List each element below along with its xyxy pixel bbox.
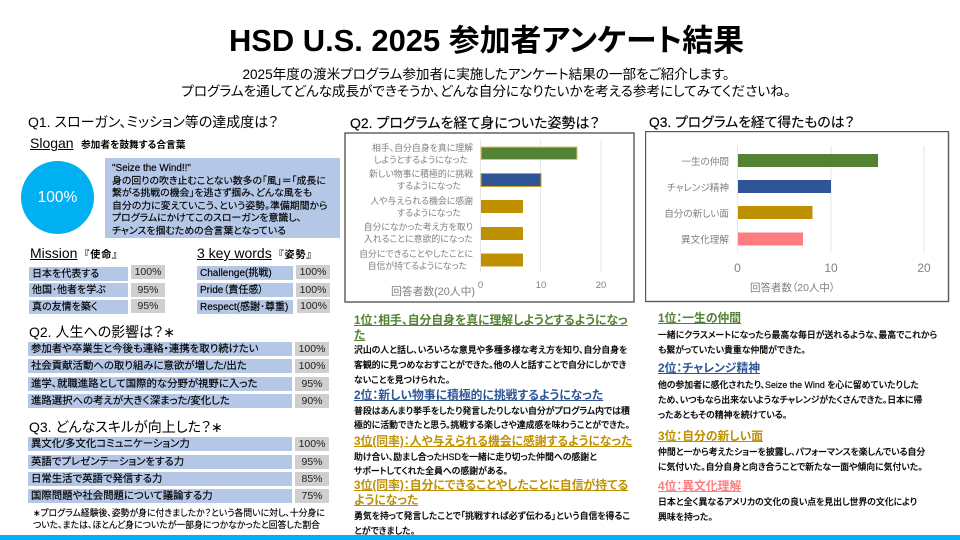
slogan text box: 自分の力に変えていこう、という姿勢。準備期間から [112, 201, 328, 212]
rank 2 comment [354, 406, 630, 430]
chart: Q2 attitudes bar chart: 入れることに意欲的になった [364, 233, 473, 244]
mission table: 95% [137, 300, 158, 312]
slogan text box: 身の回りの吹き止むことない数多の「風」＝「成長に [112, 176, 326, 187]
heading: 3 key words: 3 key words 『姿勢』 [197, 245, 312, 261]
panel: Q2 life impact [28, 324, 329, 408]
row [28, 377, 329, 391]
chart: Q2 attitudes bar chart: 人や与えられる機会に感謝 [370, 195, 473, 206]
slogan text box: プログラムにかけてこのスローガンを意識し、 [112, 213, 302, 224]
slogan text box: チャンスを掴むための合言葉となっている [112, 226, 286, 237]
chart: Q3 gains bar chart: 自分の新しい面 [664, 208, 729, 220]
intro text: プログラムを通してどんな成長ができそうか、どんな自分になりたいかを考える参考にしてみてくださいね。 [181, 84, 791, 98]
chart: Q3 gains bar chart: 回答者数（20人中） [750, 281, 835, 294]
mission table: 真の友情を築く [32, 302, 98, 313]
chart: Q2 attitudes bar chart: 自信が持てるようになった [368, 260, 467, 271]
row: 85% [301, 473, 322, 485]
rank 3 comment [658, 446, 926, 472]
row: 社会貢献活動への取り組みに意欲が増した/出た [31, 361, 247, 372]
slogan text box: "Seize the Wind!!" [112, 163, 191, 174]
rank 1 heading: 1位：相手、自分自身を真に理解しようとするようになっ [354, 313, 628, 327]
rank 2 comment: 極的に活動できたと思う。挑戦する楽しさや達成感を味わうことができた。 [354, 420, 630, 430]
rank 4 comment [658, 497, 917, 522]
row [28, 455, 329, 469]
row: 進学、就職進路として国際的な分野が視野に入った [31, 379, 257, 390]
chart: Q2 attitudes bar chart: 相手、自分自身を真に理解 [372, 142, 473, 153]
heading: Slogan: Slogan 参加者を鼓舞する合言葉 [30, 135, 185, 151]
row: 95% [301, 456, 322, 468]
rank 4 comment: 日本と全く異なるアメリカの文化の良い点を見出し世界の文化により [658, 497, 917, 507]
chart: Q3 gains bar chart: 10 [824, 261, 838, 275]
chart: Q2 attitudes bar chart: するようになった [397, 181, 461, 191]
rank 3 heading: 3位(同率)：人や与えられる機会に感謝するようになった [354, 434, 632, 448]
key words table: 100% [300, 284, 326, 296]
rank 4 heading: 4位：異文化理解 [658, 479, 741, 493]
rank 3 comment: 助け合い、励まし合ったHSDを一緒に走り切った仲間への感謝と [354, 452, 597, 462]
row: 75% [301, 490, 322, 502]
rank 2 comment [658, 380, 922, 420]
footnote [33, 508, 325, 530]
rank 1 heading [354, 313, 628, 342]
heading: chart Q3: Q3. プログラムを経て得たものは？ [649, 115, 854, 130]
chart: Q3 gains bar chart: チャレンジ精神 [667, 182, 729, 194]
rank 3 tie comment: とができました。 [354, 526, 415, 536]
chart: Q3 gains bar chart: 一生の仲間 [681, 156, 729, 168]
rank 3 tie heading: 3位(同率)：自分にできることやしたことに自信が持てる [354, 478, 628, 492]
rank 1 comment: 客観的に見つめなおすことができた。他の人と話すことで自分にしかでき [354, 360, 626, 370]
chart: Q2 attitudes bar chart: 回答者数(20人中) [391, 284, 475, 298]
title: HSD U.S. 2025 参加者アンケート結果 [229, 23, 744, 58]
rank 3 comment [354, 452, 597, 476]
panel: Q2 comments [354, 313, 632, 536]
intro text: 2025年度の渡米プログラム参加者に実施したアンケート結果の一部をご紹介します。 [242, 67, 730, 82]
row: 国際問題や社会問題について議論する力 [31, 491, 213, 502]
row: 異文化/多文化コミュニケーション力 [31, 439, 190, 450]
row [28, 342, 329, 356]
key words table [197, 265, 330, 314]
rank 1 comment [354, 344, 627, 385]
heading: Q1: Q1. スローガン、ミッション等の達成度は？ [28, 114, 278, 130]
chart: Q2 attitudes bar chart: 20 [596, 280, 606, 291]
rank 3 tie heading [354, 478, 628, 507]
row [28, 359, 329, 373]
circle: 100%: 100% [38, 189, 77, 206]
bottom band [0, 535, 960, 540]
panel: Q1 achievement [21, 114, 340, 314]
mission table: 100% [135, 266, 161, 278]
rank 3 comment: 仲間と一から考えたショーを披露し、パフォーマンスを楽しんでいる自分 [658, 447, 925, 457]
mission table: 日本を代表する [32, 269, 99, 280]
row [28, 472, 329, 486]
row: 日常生活で英語で発信する力 [31, 474, 162, 485]
rank 2 comment: ため、いつもなら出来ないようなチャレンジがたくさんできた。日本に帰 [658, 395, 922, 405]
rank 2 heading: 2位：新しい物事に積極的に挑戦するようになった [354, 388, 603, 402]
mission table: 95% [137, 284, 158, 296]
chart: Q2 attitudes bar chart: 自分にできることやしたことに [359, 248, 473, 259]
chart: Q2 attitudes bar chart: 新しい物事に積極的に挑戦 [369, 168, 473, 179]
chart: Q3 gains bar chart: 20 [917, 261, 931, 275]
row: 100% [299, 360, 325, 372]
rank 3 tie comment [354, 510, 630, 536]
rank 1 comment: 沢山の人と話し、いろいろな意見や多種多様な考え方を知り、自分自身を [354, 345, 627, 355]
row: 進路選択への考えが大きく深まった/変化した [31, 396, 230, 407]
panel: Q3 comments [658, 311, 937, 522]
chart: Q2 attitudes bar chart: 10 [536, 280, 546, 291]
chart: Q2 attitudes bar chart: 自分になかった考え方を取り [364, 221, 473, 232]
row [28, 489, 329, 503]
rank 3 tie comment: 勇気を持って発言したことで「挑戦すれば必ず伝わる」という自信を得るこ [354, 511, 630, 521]
chart: Q3 gains bar chart: 異文化理解 [681, 234, 729, 246]
chart: Q3 gains bar chart [645, 131, 950, 302]
rank 3 tie heading: ようになった [354, 493, 418, 507]
row: 100% [299, 438, 325, 450]
row: 90% [301, 395, 322, 407]
rank 1 comment [658, 330, 937, 355]
key words table: Pride（責任感） [200, 285, 263, 296]
rank 1 comment: 一緒にクラスメートになったら最高な毎日が送れるような、最高でこれから [658, 330, 937, 340]
row: 100% [299, 343, 325, 355]
heading: Mission: Mission 『使命』 [30, 245, 118, 261]
row: 参加者や卒業生と今後も連絡・連携を取り続けたい [31, 344, 258, 355]
row: 英語でプレゼンテーションをする力 [31, 457, 184, 468]
key words table: Challenge(挑戦) [200, 268, 272, 279]
rank 2 heading: 2位：チャレンジ精神 [658, 361, 760, 375]
footnote: ついた、または、ほとんど身についたが一部身につかなかったと回答した割合 [33, 520, 320, 530]
slogan text box [105, 158, 340, 238]
row [28, 437, 329, 451]
key words table: 100% [300, 300, 327, 312]
row: 95% [301, 378, 322, 390]
rank 1 comment: ないことを見つけられた。 [354, 375, 450, 385]
chart: Q2 attitudes bar chart: するようになった [397, 208, 461, 218]
key words table: 100% [300, 266, 326, 278]
key words table: Respect(感謝･尊重) [200, 302, 288, 313]
heading: Q2 life impact: Q2. 人生への影響は？∗ [29, 324, 175, 340]
heading: Q3 skills: Q3. どんなスキルが向上した？∗ [29, 419, 223, 435]
rank 1 heading: た [354, 328, 365, 342]
mission table [29, 265, 165, 314]
heading: chart Q2: Q2. プログラムを経て身についた姿勢は？ [350, 115, 600, 131]
chart: Q3 gains bar chart: 0 [734, 261, 741, 275]
rank 2 comment: 他の参加者に感化されたり、Seize the Wind を心に留めていたりした [658, 380, 919, 390]
rank 3 heading: 3位：自分の新しい面 [658, 429, 763, 443]
rank 4 comment: 興味を持った。 [658, 512, 713, 522]
intro text [181, 67, 791, 98]
footnote: ∗プログラム経験後、姿勢が身に付きましたか？という各問いに対し、十分身に [33, 508, 325, 518]
rank 2 comment: ったあともその精神を続けている。 [658, 410, 787, 420]
rank 1 heading: 1位：一生の仲間 [658, 311, 741, 325]
panel: Q3 skills [28, 419, 329, 530]
rank 2 comment: 普段はあんまり挙手をしたり発言したりしない自分がプログラム内では積 [354, 406, 630, 416]
mission table: 他国･他者を学ぶ [32, 285, 106, 296]
slogan text box: 繋がる挑戦の機会」を逃さず掴み、どんな風をも [112, 188, 312, 199]
chart: Q2 attitudes bar chart: 0 [478, 280, 483, 291]
circle: 100% [21, 161, 94, 234]
rank 3 comment: に気付いた。自分自身と向き合うことで新たな一面や傾向に気付いた。 [658, 462, 923, 472]
chart: Q2 attitudes bar chart: しようとするようになった [374, 155, 468, 165]
rank 3 comment: サポートしてくれた全員への感謝がある。 [354, 466, 508, 476]
row [28, 394, 329, 408]
chart: Q2 attitudes bar chart [344, 132, 635, 303]
rank 1 comment: も繋がっていたい貴重な仲間ができた。 [658, 345, 806, 355]
